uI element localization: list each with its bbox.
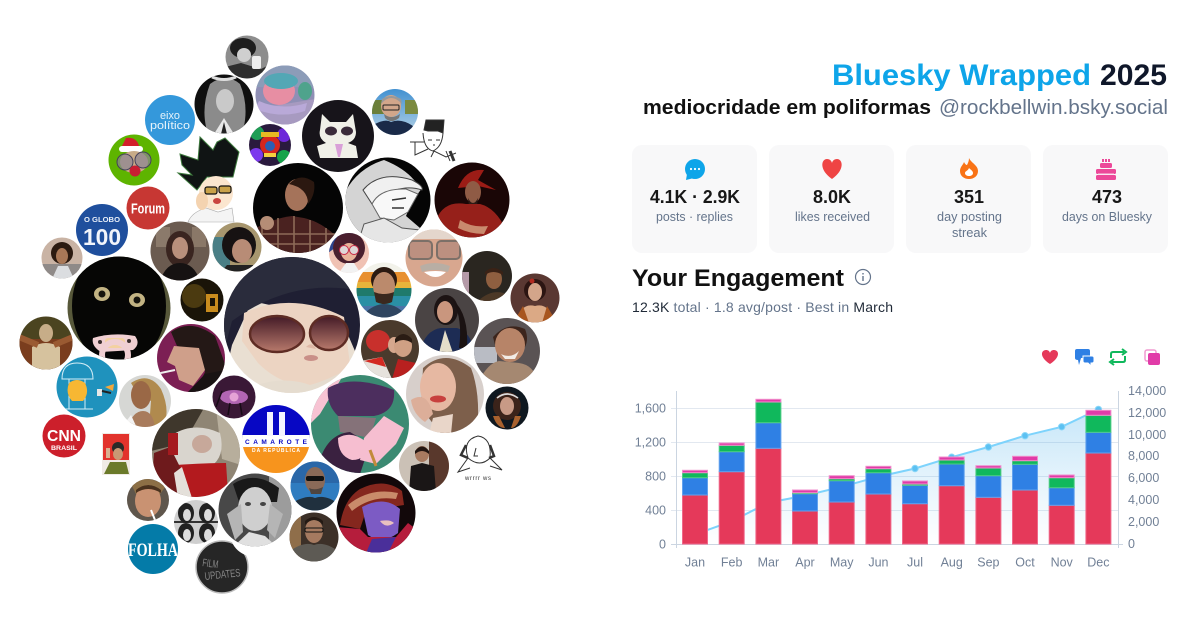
avatar: baby in big sunglasses: [223, 256, 361, 394]
stat card: days on Bluesky: [1043, 145, 1168, 253]
avatar: Camarote da Republica logo: [241, 404, 311, 474]
bars: quotes: [682, 399, 1111, 493]
avatar: woman in blue blazer: [414, 287, 480, 353]
icon: legend quotes: [1145, 350, 1160, 365]
avatar: Camarote da Republica logo: DA REPÚBLICA: [252, 447, 300, 454]
stat card: likes: [769, 145, 894, 253]
icon: heart: [822, 159, 842, 179]
month labels: Dec: [1087, 556, 1110, 570]
avatar: CNN Brasil logo: BRASIL: [51, 445, 77, 452]
month labels: Oct: [1015, 556, 1035, 570]
avatar: colourful emblem: [248, 123, 292, 167]
engagement summary: 12.3K total · 1.8 avg/post · Best in March: [632, 299, 893, 315]
right axis labels: 12,000: [1128, 406, 1166, 420]
month labels: [685, 556, 1110, 570]
avatar: Film Updates logo: UPDATES: [204, 567, 241, 583]
avatar: green background dog with santa hat: [108, 134, 160, 186]
right axis labels: 0: [1128, 537, 1135, 551]
month labels: Jan: [685, 556, 705, 570]
avatar: dark man in mural: [19, 316, 73, 370]
title: 2025: [1100, 59, 1167, 92]
cumulative area: [695, 409, 1098, 544]
month labels: Jun: [868, 556, 889, 570]
stat card: streak: streak: [952, 226, 988, 240]
month labels: Sep: [977, 556, 1000, 570]
month labels: Apr: [795, 556, 815, 570]
avatar: woman with black bob: [212, 222, 262, 272]
right axis labels: 8,000: [1128, 449, 1159, 463]
avatar: dark haired girl with headband: [485, 386, 529, 430]
avatar: hockey players kissing: [360, 319, 420, 379]
avatar: young man smoking: [126, 478, 170, 522]
avatar: man in black t-shirt: [398, 440, 450, 492]
left axis labels: 1,600: [635, 402, 666, 416]
avatar: Folha logo: [127, 523, 179, 575]
avatar: pencil sketch of a person: [458, 436, 502, 482]
profile name and handle: @rockbellwin.bsky.social: [939, 97, 1168, 119]
avatar: Forum logo: [126, 186, 170, 230]
avatar: cartoon woman with red glasses: [328, 232, 370, 274]
right axis labels: 6,000: [1128, 471, 1159, 485]
avatar: dark gold scene: [180, 278, 224, 322]
avatar: black and white man hands on face: [218, 473, 292, 547]
avatar: pencil sketch of a person: wrrrr ws: [464, 476, 491, 482]
icon: legend replies: [1075, 349, 1094, 366]
legend icons: [1042, 349, 1160, 366]
right axis labels: 2,000: [1128, 515, 1159, 529]
month labels: Feb: [721, 556, 743, 570]
profile name and handle: mediocridade em poliformas: [643, 97, 931, 119]
stat card: likes: likes received: [795, 210, 870, 224]
avatar: blonde woman with earrings: [118, 374, 172, 428]
stat card: streak: [906, 145, 1031, 253]
avatar: red jester painting: [434, 162, 510, 238]
avatar: four photo strip: [173, 499, 219, 545]
stat card: days on Bluesky: days on Bluesky: [1062, 210, 1153, 224]
avatar: man with glasses in hoodie: [289, 512, 339, 562]
month labels: Mar: [758, 556, 779, 570]
avatar: purple eye art: [212, 375, 256, 419]
avatar: white cat drawing: [301, 99, 375, 173]
avatar: comic pin-up upside down: [310, 374, 410, 474]
icon: flame: [960, 158, 978, 179]
avatar: black cat with pacifier: [68, 256, 170, 360]
avatar: Film Updates logo: FILM: [202, 557, 219, 571]
left axis labels: [635, 402, 666, 552]
avatar: eixo politico logo: eixo: [160, 110, 180, 122]
icon: speech bubble: [685, 159, 705, 180]
left axis labels: 0: [659, 538, 666, 552]
avatar: CNN Brasil logo: CNN: [47, 428, 81, 445]
avatar: person dressed as santa: [151, 408, 241, 498]
avatar: bearded man with rainbow stripes: [356, 262, 412, 318]
avatar: Forum logo: Forum: [131, 200, 165, 218]
icon: info: [856, 270, 870, 284]
heading: your engagement: Your Engagement: [632, 265, 844, 292]
avatar cluster: [19, 35, 560, 593]
avatar: line drawing of a man: [410, 120, 456, 161]
icon: cake: [1096, 159, 1116, 180]
avatar: man in dark painting: [461, 250, 513, 302]
stat card: posts and replies: 4.1K · 2.9K: [650, 187, 740, 207]
title: Bluesky Wrapped: [832, 59, 1091, 92]
avatar: blonde woman with sunglasses on head: [194, 74, 254, 134]
avatar: CNN Brasil logo: [42, 414, 86, 458]
stat card: streak: 351: [954, 187, 984, 207]
avatar: curly haired man at beach: [41, 237, 83, 279]
right axis labels: [1128, 384, 1166, 551]
left axis labels: 400: [645, 504, 666, 518]
avatar: anime boy with spiky hair: [178, 137, 239, 222]
month labels: Jul: [907, 556, 923, 570]
avatar: O Globo 100 logo: 100: [83, 224, 121, 250]
month labels: May: [830, 556, 854, 570]
cumulative line: [692, 406, 1102, 538]
right axis labels: 14,000: [1128, 384, 1166, 398]
bars: replies: [682, 423, 1111, 511]
icon: legend reposts: [1110, 349, 1126, 365]
stat card: posts and replies: [632, 145, 757, 253]
avatar: O Globo 100 logo: O GLOBO: [84, 215, 120, 224]
avatar: Folha logo: FOLHA: [128, 540, 178, 561]
avatar: man with glasses by a lake: [371, 88, 419, 136]
stat card: streak: day posting: [937, 210, 1002, 224]
profile name and handle: [643, 97, 1168, 119]
avatar: eixo politico logo: político: [150, 120, 190, 132]
month labels: Nov: [1051, 556, 1074, 570]
combo chart: monthly engagement bars with cumulative line: [635, 384, 1166, 570]
stat card: posts and replies: posts · replies: [656, 210, 733, 224]
stat card: likes: 8.0K: [813, 187, 851, 207]
bars: likes: [682, 448, 1111, 544]
avatar: O Globo 100 logo: [75, 203, 129, 257]
avatar: eixo politico logo: [144, 94, 196, 146]
avatar: bald man in sunglasses: [290, 461, 340, 511]
right axis labels: 4,000: [1128, 493, 1159, 507]
avatar: red poster illustration: [102, 433, 130, 475]
right axis labels: 10,000: [1128, 428, 1166, 442]
avatar: black and white portrait: [225, 35, 269, 79]
left axis labels: 800: [645, 470, 666, 484]
avatar: classical painting woman: [510, 273, 560, 323]
stat card: days on Bluesky: 473: [1092, 187, 1122, 207]
avatar: smiling old man close up: [405, 229, 463, 287]
avatar: pink anime character in bed: [255, 65, 315, 125]
avatar: Camarote da Republica logo: CAMAROTE: [245, 439, 308, 446]
month labels: Aug: [941, 556, 963, 570]
avatar: Beatles style man smoking: [156, 323, 226, 393]
left axis labels: 1,200: [635, 436, 666, 450]
icon: legend heart: [1042, 350, 1058, 364]
avatar: woman with long brown hair: [405, 354, 485, 434]
avatar: laughing young man: [473, 317, 541, 385]
avatar: man with brown curly hair in plaid: [252, 162, 344, 254]
bars: reposts: [682, 402, 1111, 494]
avatar: manga character with hat: [345, 157, 431, 243]
avatar: light bulb in cage logo: [56, 356, 118, 418]
avatar: red film still with glitter headband: [336, 473, 416, 553]
avatar: girl in dim room: [150, 221, 210, 281]
avatar: Film Updates logo: [196, 541, 248, 593]
